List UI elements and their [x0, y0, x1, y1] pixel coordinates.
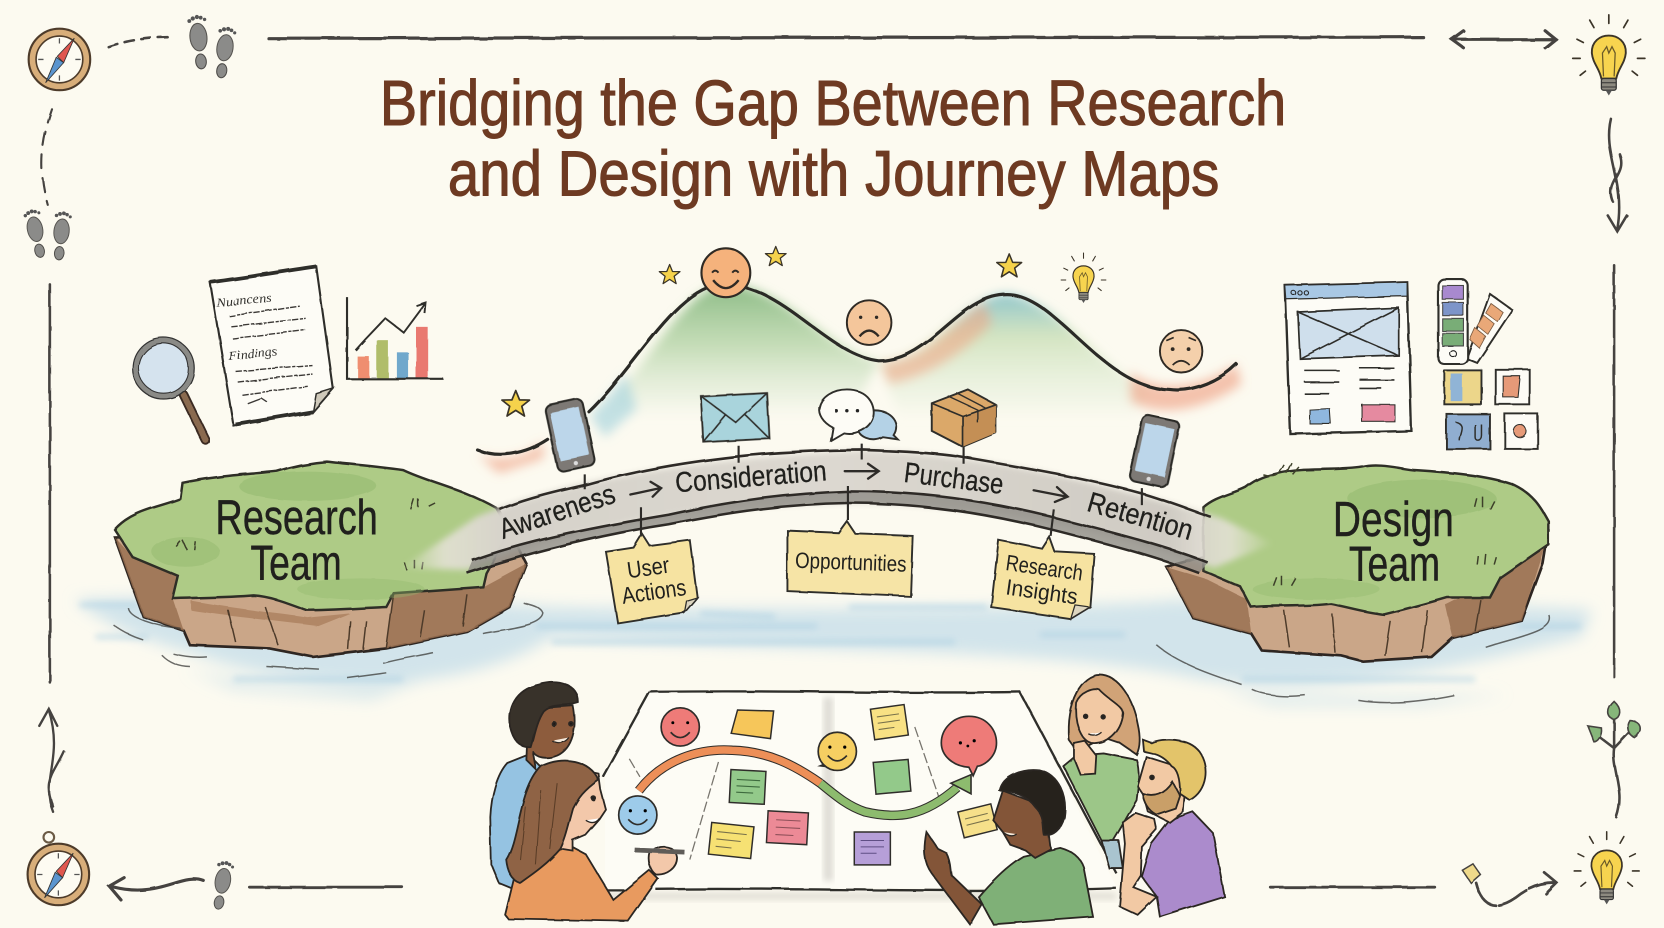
stage arrows	[630, 464, 1068, 502]
sticky note: User Actions	[606, 534, 697, 623]
person: man in green shirt pointing	[924, 770, 1093, 924]
person: woman in green sweater	[1063, 675, 1140, 868]
icon: compass bottom left	[28, 832, 89, 905]
title	[380, 68, 1286, 209]
thin dashed guides	[629, 727, 939, 860]
panel: journey map board	[603, 691, 1116, 900]
bar chart	[347, 297, 444, 379]
icon: compass top left	[29, 29, 90, 90]
bridge deck	[401, 450, 1273, 570]
stage: Retention: Retention	[1084, 486, 1197, 547]
note: orange	[731, 710, 774, 739]
face: yellow smile	[817, 732, 856, 770]
title line 1: Bridging the Gap Between Research	[380, 68, 1286, 139]
icon: light bulb bottom right	[1574, 832, 1639, 904]
left border line	[49, 284, 51, 682]
note: green small	[873, 759, 911, 794]
right island	[1166, 463, 1548, 661]
icon: stars on curve	[502, 246, 1022, 416]
icon: colour swatch fan	[1438, 279, 1512, 364]
journey curve	[478, 284, 1242, 473]
icon group: design tiles	[1444, 369, 1538, 449]
right island label: Design	[1333, 493, 1454, 547]
title line 2: and Design with Journey Maps	[448, 138, 1219, 209]
island grass	[115, 462, 509, 610]
left island	[115, 462, 526, 657]
right island label	[1333, 493, 1454, 591]
note: purple	[854, 832, 890, 865]
icon: phone left	[544, 398, 596, 472]
panel: research document	[210, 266, 333, 426]
arrow: bottom squiggle right	[1476, 872, 1557, 905]
tile 4	[1505, 414, 1538, 449]
icon: footprints top	[187, 14, 237, 79]
icon: small sticky note	[1462, 864, 1480, 883]
icon: single footprint bottom	[210, 860, 235, 911]
curve colour wash	[478, 284, 1242, 473]
stage: Purchase: Purchase	[902, 457, 1005, 501]
icon: magnifying glass	[133, 337, 206, 440]
note text: User Actions	[620, 552, 688, 609]
tile 3	[1446, 414, 1490, 449]
note text: Research Insights	[1004, 550, 1084, 609]
bridge	[401, 450, 1273, 573]
island grass	[1203, 465, 1548, 614]
icon: idea bulb on curve	[1061, 253, 1106, 303]
island cliff	[115, 509, 526, 657]
note text: User Actions: User	[625, 552, 671, 583]
arrow: journey path on board	[639, 750, 971, 815]
dashed trail left	[42, 109, 52, 205]
note text: Opportunities: Opportunities	[795, 548, 907, 577]
stage: Awareness: Awareness	[495, 478, 619, 546]
note: yellow angled	[958, 804, 997, 838]
tile 1	[1444, 370, 1481, 404]
document subheading: Findings	[227, 344, 278, 364]
bubble: red	[941, 716, 996, 776]
face: red smile	[661, 708, 699, 746]
icon: speech bubbles	[819, 389, 898, 440]
bridge stage labels	[495, 455, 1197, 547]
face: blue smile	[619, 796, 657, 834]
note: pink	[766, 811, 808, 845]
arrow: left wavy up	[39, 709, 64, 812]
left island label	[215, 491, 378, 590]
dashed trail top	[108, 37, 172, 47]
icon: envelope	[701, 393, 770, 442]
icon: footprints left	[23, 208, 72, 261]
top border line	[268, 37, 1423, 38]
bottom border line right	[1270, 886, 1435, 888]
sticky note: Opportunities	[787, 521, 913, 596]
arrow: right wavy down	[1608, 119, 1627, 231]
icon: sad face 2	[1160, 330, 1202, 372]
sticky note: Research Insights	[991, 537, 1094, 619]
note text: Research Insights: Insights	[1004, 574, 1079, 609]
note: yellow top	[870, 705, 908, 740]
island cliff	[1166, 509, 1548, 661]
ripples	[114, 603, 1550, 703]
stage: Consideration: Consideration	[674, 455, 828, 499]
icon: phone right	[1129, 414, 1180, 488]
icon: plant sprig	[1588, 701, 1640, 817]
note: yellow lined	[708, 822, 754, 859]
water	[74, 596, 1592, 706]
person: man in blue shirt	[490, 682, 578, 890]
icon: happy face	[701, 248, 750, 297]
left island label: Team	[250, 536, 342, 590]
panel: wireframe browser	[1285, 282, 1411, 434]
person: man in purple shirt	[1120, 740, 1225, 917]
tile 2	[1495, 369, 1529, 404]
bottom border line left	[249, 886, 402, 888]
left island label: Research	[215, 491, 378, 545]
bridge edges	[467, 450, 1211, 573]
right border line	[1613, 265, 1615, 677]
note text: Research Insights: Research	[1004, 550, 1084, 586]
right island label: Team	[1349, 537, 1440, 591]
arrow: bottom wavy left	[109, 878, 204, 900]
note text: User Actions: Actions	[620, 574, 688, 609]
note: green lined	[729, 770, 766, 804]
person: woman in orange shirt	[505, 761, 684, 921]
arrow: top double arrow	[1452, 31, 1556, 48]
icon: parcel	[932, 389, 995, 447]
icon: light bulb top right	[1573, 15, 1645, 96]
curve line	[478, 284, 1236, 454]
icon: sad face 1	[847, 300, 891, 345]
connector ticks	[585, 444, 1142, 536]
bridge underside band	[467, 491, 1208, 573]
document heading: Nuancens	[215, 291, 272, 310]
